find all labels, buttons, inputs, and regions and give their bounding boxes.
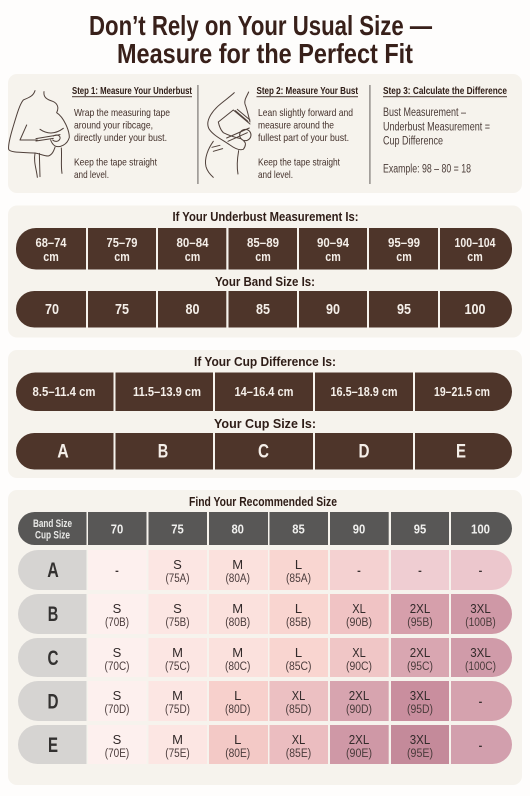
table header: 90: [353, 522, 365, 537]
row A: (80A): [225, 573, 250, 585]
row A: (85A): [286, 573, 311, 585]
row E: (75E): [165, 748, 190, 760]
row B: S: [113, 601, 122, 616]
row C: (95C): [407, 661, 433, 673]
step 2 text: measure around the: [258, 120, 334, 132]
underbust range row: 75–79: [106, 236, 138, 250]
underbust range row: cm: [255, 250, 271, 264]
row A: L: [295, 557, 302, 572]
table header: 100: [471, 522, 490, 537]
step 1 text: Step 1: Measure Your Underbust: [72, 85, 192, 97]
row C: [18, 638, 512, 677]
row B: (85B): [286, 617, 311, 629]
row C: (100C): [465, 661, 496, 673]
table header: 80: [231, 522, 244, 537]
band size row: 75: [115, 302, 129, 318]
step 1 text: Wrap the measuring tape: [74, 107, 170, 119]
heading: cup difference: If Your Cup Difference Is:: [194, 355, 336, 369]
underbust range row: 90–94: [317, 236, 349, 250]
row D: 3XL: [410, 688, 430, 703]
cup difference row: [16, 372, 512, 411]
heading: find size: Find Your Recommended Size: [189, 495, 337, 509]
cup difference row: 16.5–18.9 cm: [330, 385, 398, 399]
row A: A: [47, 559, 59, 582]
row B: XL: [352, 601, 366, 616]
row B: 2XL: [410, 601, 430, 616]
cup difference row: 11.5–13.9 cm: [133, 385, 201, 399]
row D: S: [113, 688, 122, 703]
row B: M: [232, 601, 243, 616]
underbust range row: cm: [325, 250, 341, 264]
underbust range row: 68–74: [36, 236, 67, 250]
row C: (70C): [104, 661, 130, 673]
row C: (75C): [165, 661, 190, 673]
row B: (70B): [105, 617, 129, 629]
band size row: 90: [326, 302, 340, 318]
row C: (80C): [225, 661, 251, 673]
table header: 70: [111, 522, 123, 537]
table header: Band Size: [33, 518, 72, 530]
row C: S: [113, 645, 122, 660]
row B: (75B): [166, 617, 190, 629]
row E: [18, 725, 512, 764]
table header: 85: [292, 522, 305, 537]
row D: 2XL: [349, 688, 369, 703]
cup size row: D: [358, 442, 370, 462]
row B: (95B): [407, 617, 433, 629]
cup difference row: 8.5–11.4 cm: [32, 385, 96, 399]
heading: underbust: If Your Underbust Measurement Is:: [172, 210, 358, 224]
cup size row: [16, 433, 512, 470]
row E: (85E): [286, 748, 311, 760]
band size row: 80: [186, 302, 200, 318]
cup difference row: 14–16.4 cm: [234, 385, 294, 399]
step 2 text: fullest part of your bust.: [258, 132, 349, 144]
row E: XL: [292, 732, 305, 747]
step 1 text: directly under your bust.: [74, 132, 167, 144]
underbust range row: 85–89: [247, 236, 279, 250]
step 2 text: Lean slightly forward and: [258, 107, 353, 119]
row E: (95E): [407, 748, 433, 760]
row A: M: [232, 557, 243, 572]
step 1 text: and level.: [74, 169, 109, 181]
row D: [18, 681, 512, 721]
row A: (75A): [166, 573, 190, 585]
row C: L: [295, 645, 302, 660]
row B: L: [295, 601, 302, 616]
panel: measuring steps: [8, 74, 522, 193]
icon: woman measuring bust: [205, 92, 251, 177]
cup size row: A: [57, 442, 69, 462]
band size row: [16, 291, 512, 328]
row C: M: [232, 645, 243, 660]
row D: (80D): [225, 704, 251, 716]
row B: 3XL: [470, 601, 491, 616]
underbust range row: cm: [467, 250, 483, 264]
row B: [18, 594, 512, 634]
row D: (90D): [346, 704, 372, 716]
cup size row: B: [158, 442, 168, 462]
row A: -: [357, 565, 361, 577]
table header: [18, 512, 512, 545]
row E: E: [48, 734, 58, 757]
row A: [18, 550, 512, 590]
cup size row: C: [258, 442, 269, 462]
step 3 text: [383, 85, 507, 175]
row B: (80B): [225, 617, 250, 629]
row D: (95D): [407, 704, 433, 716]
row C: (85C): [286, 661, 312, 673]
row D: (75D): [165, 704, 190, 716]
table header: Cup Size: [35, 530, 70, 542]
row E: 2XL: [349, 732, 369, 747]
table header: 75: [171, 522, 184, 537]
row C: XL: [352, 645, 366, 660]
row C: C: [48, 647, 58, 670]
heading: cup size: Your Cup Size Is:: [214, 417, 316, 431]
step 1 text: [72, 85, 192, 181]
underbust range row: 95–99: [388, 236, 420, 250]
step 2 text: Keep the tape straight: [258, 157, 340, 169]
band size row: 100: [464, 302, 486, 318]
band size row: 70: [45, 302, 59, 318]
underbust range row: cm: [114, 250, 130, 264]
row C: (90C): [346, 661, 372, 673]
row C: 2XL: [410, 645, 430, 660]
row A: -: [479, 565, 483, 577]
step 3 text: Example: 98 – 80 = 18: [383, 163, 471, 175]
row A: S: [173, 557, 182, 572]
row B: S: [173, 601, 182, 616]
row D: L: [234, 688, 241, 703]
row C: M: [172, 645, 183, 660]
step 2 text: Step 2: Measure Your Bust: [256, 85, 358, 97]
underbust range row: cm: [396, 250, 412, 264]
row D: D: [48, 690, 58, 714]
row D: (70D): [104, 704, 130, 716]
underbust range row: 100–104: [454, 236, 496, 250]
heading: band size: Your Band Size Is:: [215, 275, 315, 289]
row D: (85D): [286, 704, 312, 716]
step 1 text: around your ribcage,: [74, 120, 153, 132]
step 3 text: Bust Measurement –: [383, 107, 466, 119]
cup size row: E: [456, 442, 466, 462]
step 3 text: Underbust Measurement =: [383, 122, 490, 134]
title: [89, 10, 432, 69]
step 2 text: [256, 85, 358, 181]
row E: 3XL: [410, 732, 430, 747]
step 1 text: Keep the tape straight: [74, 157, 157, 169]
title: Don’t Rely on Your Usual Size —: [89, 10, 432, 41]
table header: 95: [414, 522, 426, 537]
row E: L: [234, 732, 241, 747]
row D: XL: [292, 688, 305, 703]
row B: (100B): [465, 617, 496, 629]
row E: (70E): [105, 748, 129, 760]
underbust range row: 80–84: [176, 236, 209, 250]
underbust range row: cm: [185, 250, 200, 264]
row B: B: [48, 603, 58, 626]
cup difference row: 19–21.5 cm: [434, 385, 490, 399]
row A: -: [115, 565, 119, 577]
band size row: 85: [256, 302, 270, 318]
step 3 text: Cup Difference: [383, 136, 443, 148]
underbust range row: cm: [43, 250, 59, 264]
panel: cup size: [8, 350, 522, 478]
row E: -: [479, 740, 483, 752]
row C: 3XL: [470, 645, 491, 660]
row E: (90E): [346, 748, 372, 760]
row D: M: [172, 688, 183, 703]
row D: -: [479, 696, 483, 708]
row E: (80E): [225, 748, 250, 760]
panel: band size: [8, 206, 522, 338]
band size row: 95: [397, 302, 411, 318]
title: Measure for the Perfect Fit: [117, 38, 413, 69]
panel: size chart: [8, 490, 522, 785]
underbust range row: [16, 228, 512, 270]
row B: (90B): [346, 617, 372, 629]
row A: -: [418, 565, 422, 577]
icon: woman measuring underbust: [9, 91, 69, 177]
step 2 text: and level.: [258, 169, 293, 181]
row E: S: [113, 732, 122, 747]
row E: M: [172, 732, 183, 747]
